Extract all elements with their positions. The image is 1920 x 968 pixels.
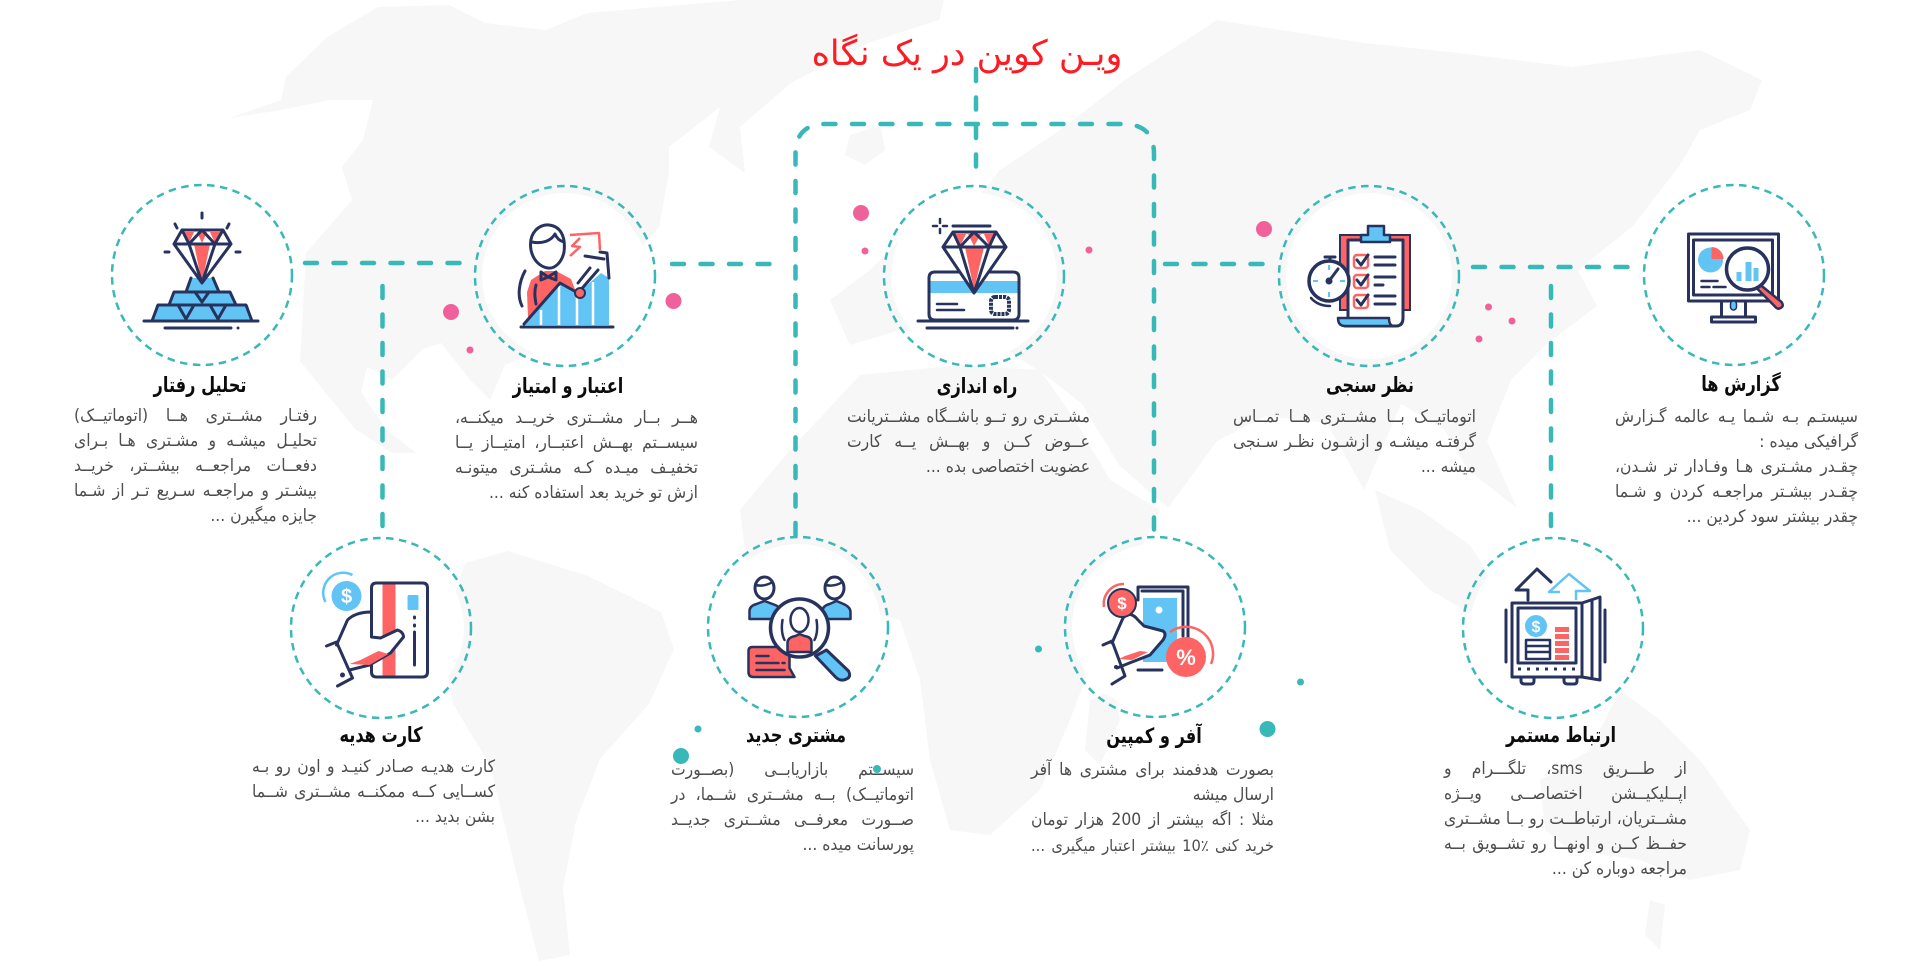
icon: open safe with arrows <box>1462 536 1644 720</box>
text block: هــر بــار مشــتری خریــد میکنــه، <box>455 408 698 428</box>
icon: hand holding gift card <box>290 536 472 720</box>
text block: تخفیـف میـده کـه مشـتری میتونـه <box>455 458 698 478</box>
text block <box>1233 406 1476 476</box>
icon: man with rising chart <box>474 184 656 368</box>
text block: کســایی کــه ممکنــه مشــتری شــما <box>252 782 495 802</box>
text block: پورسانت میده ... <box>802 835 914 855</box>
text block: از طـــریق sms، تلگـــرام و <box>1444 758 1687 778</box>
text block: تحلیـل میشـه و مشـتری هـا بـرای <box>74 431 317 451</box>
heading: نظر سنجی <box>1326 373 1414 397</box>
text block: خرید کنی ٪10 بیشتر اعتبار میگیری ... <box>1031 836 1274 854</box>
text block <box>74 406 317 526</box>
text block <box>455 408 698 502</box>
text block: عــوض کــن و بهــش یــه کارت <box>847 432 1090 452</box>
text block: بشن بدید ... <box>415 806 495 826</box>
heading: ارتباط مستمر <box>1506 723 1616 747</box>
icon: stopwatch and checklist <box>1278 184 1460 368</box>
text block: مراجعه دوباره کن ... <box>1552 858 1687 878</box>
text block: صــورت معرفــی مشــتری جدیــد <box>671 810 914 830</box>
text block: اپــلیکیــشن اختصاصــی ویــژه <box>1444 784 1687 804</box>
panel: reports <box>1615 184 1858 526</box>
text block: چقـدر بیشـتر مراجعـه کردن و شـما <box>1615 482 1858 502</box>
heading: کارت هدیه <box>339 723 423 747</box>
icon: hand with money and percent <box>1064 536 1246 718</box>
panel: new customer <box>670 536 914 855</box>
heading: تحلیل رفتار <box>154 373 246 397</box>
text block: مشــتری رو تــو باشــگاه مشــتریانت <box>847 406 1090 426</box>
text block: حفــظ کــن و اونهــا رو تشــویق بــه <box>1444 834 1687 854</box>
heading: راه اندازی <box>937 374 1017 398</box>
text block: سیســتم بازاریابــی (بصــورت <box>671 760 914 780</box>
panel: survey <box>1233 184 1476 476</box>
text block <box>1030 759 1274 855</box>
heading: اعتبار و امتیاز <box>513 374 623 398</box>
text block: اتوماتیــک بــا مشــتری هــا تمــاس <box>1233 406 1476 426</box>
icon: diamond on gold bars <box>110 184 294 366</box>
text block: ارسال میشه <box>1193 784 1274 804</box>
text block: عضویت اختصاصی بده ... <box>926 456 1090 476</box>
text block: اتوماتیــک) بــه مشــتری شــما، در <box>671 785 914 805</box>
icon: hand holding gift card: $ <box>340 586 352 608</box>
panel: launch <box>847 184 1090 476</box>
text block: مثلا : اگه بیشتر از 200 هزار تومان <box>1031 810 1274 830</box>
icon: diamond and membership card <box>882 184 1066 368</box>
icon: people under magnifier <box>706 536 890 718</box>
text block: ازش تو خرید بعد استفاده کنه ... <box>489 482 698 502</box>
text block: سیســتم بهــش اعتبــار، امتیــاز یــا <box>455 432 698 452</box>
icon: open safe with arrows: $ <box>1532 619 1541 636</box>
text block: کارت هدیـه صـادر کنیـد و اون رو بـه <box>252 756 495 776</box>
text block: گرافیکی میده : <box>1759 432 1858 452</box>
text block <box>847 406 1090 476</box>
text block: دفعــات مراجعــه بیشــتر، خریــد <box>74 456 317 476</box>
panel: credit and points <box>455 184 698 502</box>
text block: سیستـم بـه شـما یـه عالمه گـزارش <box>1615 406 1858 426</box>
text block: رفتـار مشــتری هــا (اتوماتیــک) <box>74 406 317 426</box>
panel: gift card <box>252 536 496 826</box>
heading: مشتری جدید <box>746 723 846 747</box>
heading: آفر و کمپین <box>1106 724 1202 748</box>
heading: گزارش ها <box>1701 372 1781 396</box>
text block: جایزه میگیرن ... <box>210 506 317 526</box>
text block: چقدر بیشتر سود کردین ... <box>1687 506 1858 526</box>
text block <box>252 756 496 826</box>
icon: hand with money and percent: $ <box>1117 594 1127 613</box>
text block: بصورت هدفمند برای مشتری ها آفر <box>1031 760 1274 780</box>
text block <box>1443 758 1687 878</box>
panel: continuous contact <box>1443 536 1687 878</box>
panel: behaviour analysis <box>74 184 317 526</box>
text block: چقـدر مشـتری هـا وفـادار تر شـدن، <box>1615 456 1858 476</box>
text block <box>1615 406 1858 526</box>
title: ویـن کوین در یک نگاه <box>812 34 1122 74</box>
text block: بیشـتر و مراجعـه سـریع تـر از شـما <box>74 481 317 501</box>
text block: میشه ... <box>1421 456 1476 476</box>
text block <box>670 760 914 855</box>
icon: hand with money and percent: % <box>1176 645 1196 670</box>
panel: offers and campaigns <box>1030 536 1274 855</box>
icon: monitor with magnifier <box>1642 184 1826 366</box>
text block: گرفتـه میشـه و ازشـون نظـر سـنجی <box>1233 432 1476 452</box>
text block: مشــتریان، ارتباطــت رو بــا مشــتری <box>1444 808 1687 828</box>
